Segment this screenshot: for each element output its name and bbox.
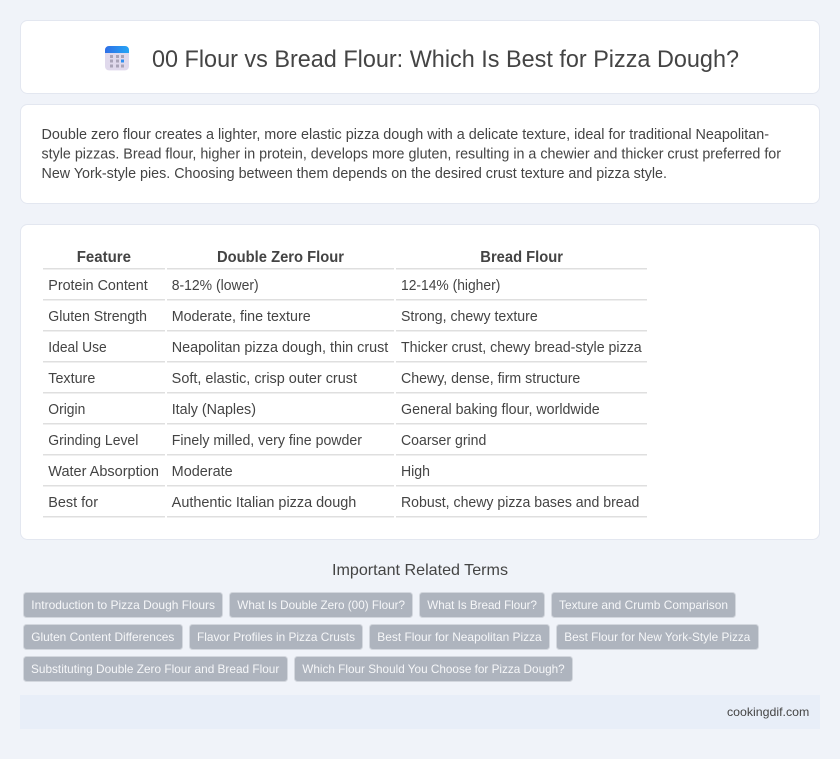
intro text: New York-style pies. Choosing between them depends on the desired crust texture and pizza style.: [42, 166, 667, 182]
row: protein content: 12-14% (higher): [401, 278, 500, 294]
title: 00 Flour vs Bread Flour: Which Is Best for Pizza Dough?: [152, 46, 739, 73]
tag: introduction: [24, 592, 222, 618]
tag: gluten content: [24, 624, 182, 650]
row: water absorption: Moderate: [172, 464, 233, 480]
row: texture: [43, 371, 647, 394]
row: water absorption: Water Absorption: [48, 464, 159, 480]
row: ideal use: [43, 340, 647, 362]
row: texture: Soft, elastic, crisp outer crust: [172, 371, 357, 387]
tag: bread flour: [420, 592, 544, 618]
row: grinding level: Coarser grind: [401, 433, 486, 449]
footer site name: cookingdif.com: [727, 705, 809, 719]
tag: gluten content: Gluten Content Differences: [31, 630, 174, 644]
row: gluten strength: Gluten Strength: [48, 309, 147, 325]
tag: texture and crumb: Texture and Crumb Comparison: [559, 598, 728, 612]
tag: substituting: [24, 656, 288, 682]
tag: which flour: [294, 656, 572, 682]
row: grinding level: Grinding Level: [48, 433, 138, 449]
row: gluten strength: [43, 309, 647, 332]
row: texture: Texture: [48, 371, 95, 387]
tag: double zero: [230, 592, 412, 618]
row: origin: General baking flour, worldwide: [401, 402, 600, 418]
tag: neapolitan: Best Flour for Neapolitan Pizza: [377, 630, 542, 644]
row: gluten strength: Moderate, fine texture: [172, 309, 311, 325]
row: ideal use: Thicker crust, chewy bread-style pizza: [401, 340, 642, 356]
row: origin: Origin: [48, 402, 85, 418]
row: origin: Italy (Naples): [172, 402, 256, 418]
header panel: [20, 20, 820, 94]
intro text: [42, 127, 781, 182]
table header: Double Zero Flour: [217, 249, 344, 266]
row: gluten strength: Strong, chewy texture: [401, 309, 538, 325]
comparison table panel: [20, 224, 820, 540]
related terms heading: Important Related Terms: [332, 562, 508, 579]
row: water absorption: High: [401, 464, 430, 480]
tag: texture and crumb: [552, 592, 736, 618]
row: grinding level: [43, 433, 647, 456]
tag: flavor profiles: Flavor Profiles in Pizza Crusts: [197, 630, 355, 644]
tag: new york: [556, 624, 758, 650]
row: best for: [43, 495, 647, 518]
tag: new york: Best Flour for New York-Style Pizza: [564, 630, 751, 644]
footer: [20, 695, 820, 729]
tag: neapolitan: [370, 624, 550, 650]
row: protein content: 8-12% (lower): [172, 278, 259, 294]
row: ideal use: Ideal Use: [48, 340, 107, 356]
related term tags: [24, 592, 758, 682]
intro text: style pizzas. Bread flour, higher in protein, develops more gluten, resulting in a chewier and thicker crust preferred for: [42, 146, 781, 162]
row: best for: Robust, chewy pizza bases and bread: [401, 495, 639, 511]
row: origin: [43, 402, 647, 424]
row: best for: Best for: [48, 495, 98, 511]
tag: which flour: Which Flour Should You Choose for Pizza Dough?: [302, 662, 565, 676]
row: protein content: [43, 278, 647, 300]
row: texture: Chewy, dense, firm structure: [401, 371, 580, 387]
row: protein content: Protein Content: [48, 278, 148, 294]
tag: introduction: Introduction to Pizza Dough Flours: [31, 598, 215, 612]
tag: substituting: Substituting Double Zero Flour and Bread Flour: [31, 662, 279, 676]
intro panel: [20, 104, 820, 204]
tag: double zero: What Is Double Zero (00) Flour?: [237, 598, 405, 612]
tag: bread flour: What Is Bread Flour?: [427, 598, 537, 612]
table header: Bread Flour: [480, 249, 563, 266]
row: ideal use: Neapolitan pizza dough, thin crust: [172, 340, 388, 356]
tag: flavor profiles: [190, 624, 362, 650]
row: best for: Authentic Italian pizza dough: [172, 495, 356, 511]
table header: [43, 249, 647, 270]
table header: Feature: [77, 249, 131, 266]
icon: calendar: [105, 46, 129, 70]
intro text: Double zero flour creates a lighter, more elastic pizza dough with a delicate texture, ideal for traditional Neapolitan-: [42, 127, 769, 143]
row: grinding level: Finely milled, very fine powder: [172, 433, 362, 449]
row: water absorption: [43, 464, 647, 486]
